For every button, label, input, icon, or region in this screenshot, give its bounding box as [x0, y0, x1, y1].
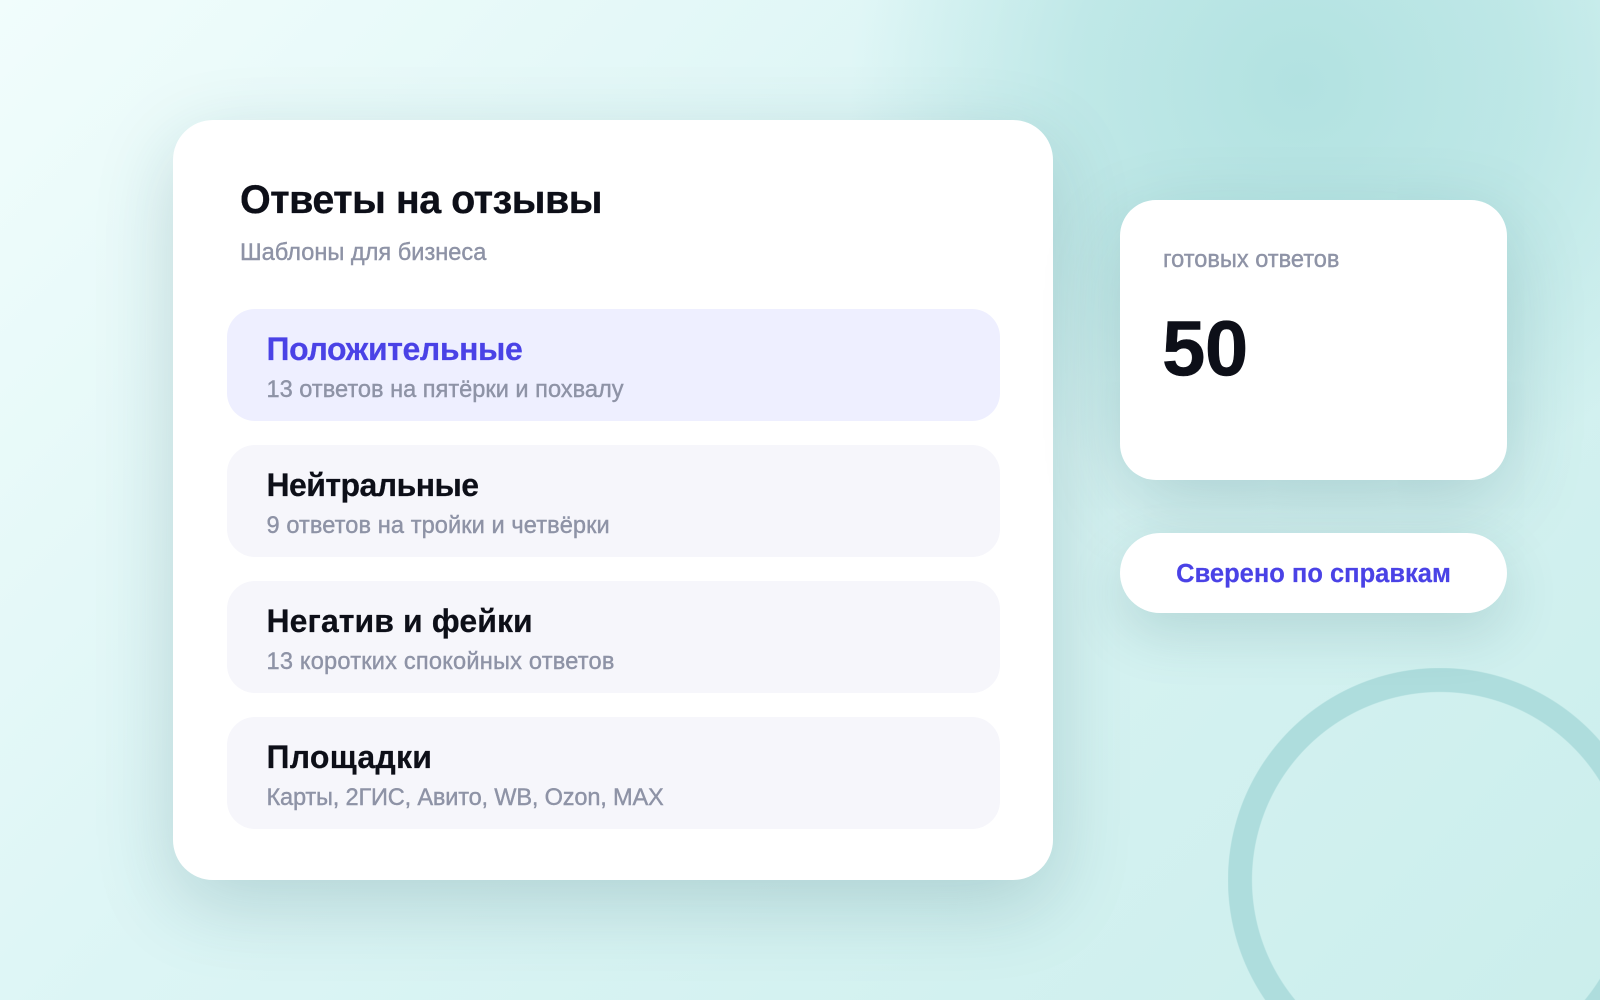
badge: verified	[1120, 533, 1507, 613]
row description: 13 ответов на пятёрки и похвалу	[266, 376, 624, 402]
background glow	[850, 0, 1600, 520]
row: positive	[227, 309, 1000, 421]
row description: Карты, 2ГИС, Авито, WB, Ozon, MAX	[266, 784, 664, 810]
row description: 9 ответов на тройки и четвёрки	[266, 512, 610, 538]
row heading: Положительные	[266, 330, 522, 366]
row description: 13 коротких спокойных ответов	[266, 648, 615, 674]
row heading: Нейтральные	[266, 466, 478, 502]
row heading: Негатив и фейки	[266, 602, 533, 638]
subtitle: Шаблоны для бизнеса	[240, 240, 486, 266]
row: neutral	[227, 445, 1000, 557]
decorative ring	[1228, 668, 1600, 1000]
panel: main card	[173, 120, 1053, 880]
stat label: готовых ответов	[1163, 246, 1339, 272]
badge text: Сверено по справкам	[1176, 560, 1451, 588]
row: platforms	[227, 717, 1000, 829]
stat number: 50	[1162, 304, 1248, 392]
title: Ответы на отзывы	[240, 178, 602, 222]
row: negative and fakes	[227, 581, 1000, 693]
row heading: Площадки	[266, 738, 432, 774]
panel: stat card	[1120, 200, 1507, 480]
